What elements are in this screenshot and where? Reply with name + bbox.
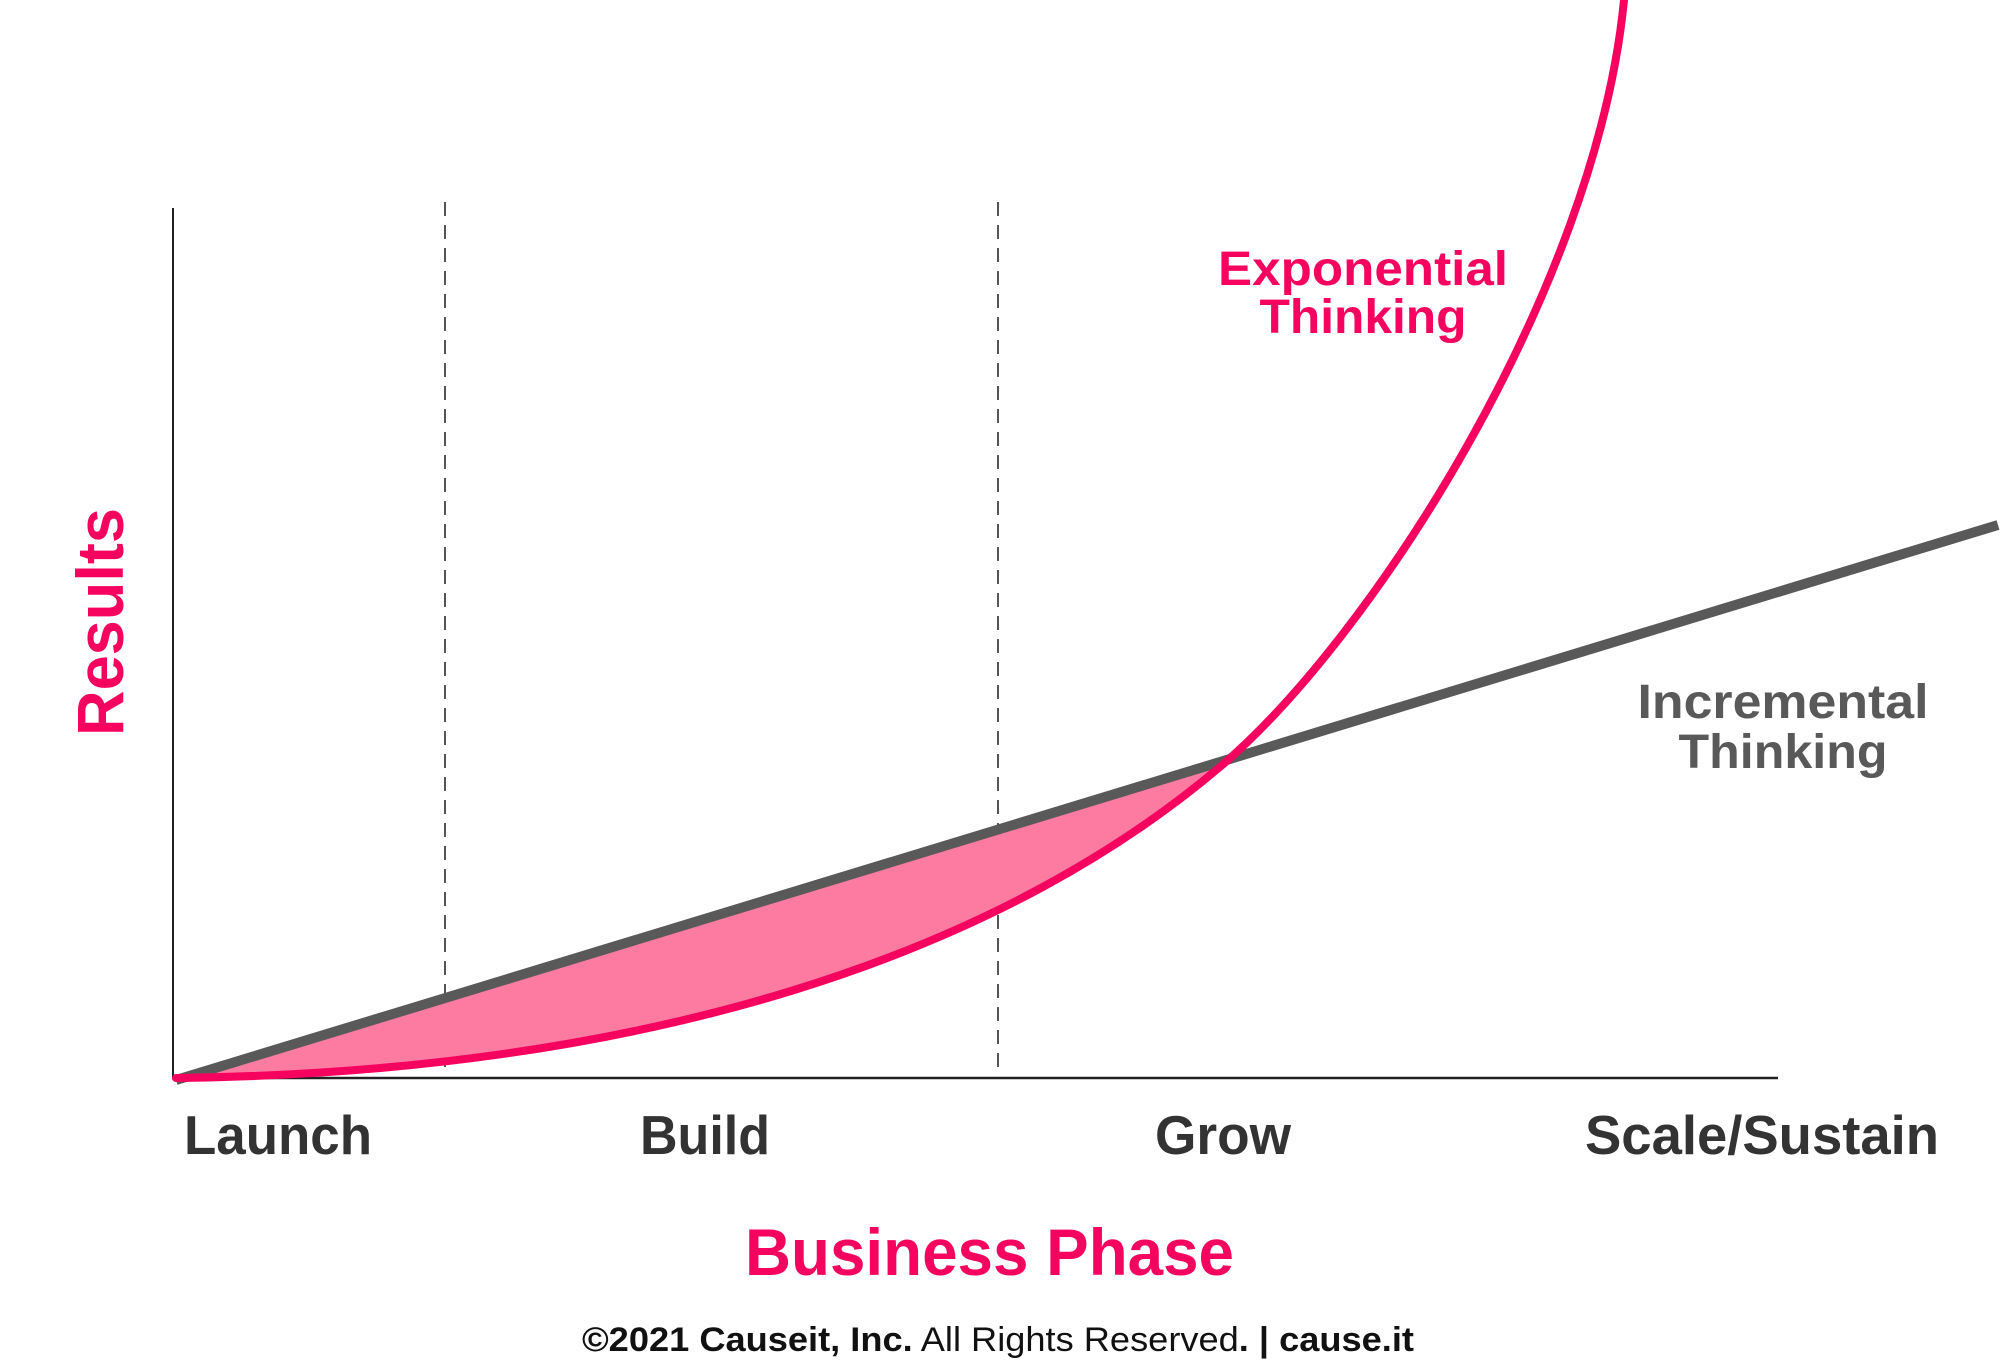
phase divider: build/grow xyxy=(997,202,999,1076)
x axis title: Business Phase xyxy=(745,1215,1234,1289)
phase labels xyxy=(184,1104,1939,1166)
x axis xyxy=(172,1077,1778,1079)
y axis xyxy=(172,208,174,1078)
label: exponential thinking: Exponential xyxy=(1218,243,1508,296)
label: exponential thinking: Thinking xyxy=(1260,291,1466,344)
curve: exponential xyxy=(176,0,1624,1078)
phase labels: Launch xyxy=(184,1104,372,1166)
line: incremental xyxy=(176,525,1998,1080)
phase labels: Build xyxy=(640,1104,770,1166)
footer: ©2021 Causeit, Inc. All Rights Reserved . | cause.it xyxy=(582,1321,1414,1359)
phase divider: launch/build xyxy=(444,202,446,1076)
label: incremental thinking: Incremental xyxy=(1638,676,1928,729)
phase labels: Grow xyxy=(1155,1104,1291,1166)
phase labels: Scale/Sustain xyxy=(1585,1104,1939,1166)
y axis title: Results xyxy=(63,508,137,736)
label: incremental thinking: Thinking xyxy=(1678,726,1888,779)
chart xyxy=(172,0,1998,1080)
shaded gap area xyxy=(176,762,1221,1080)
